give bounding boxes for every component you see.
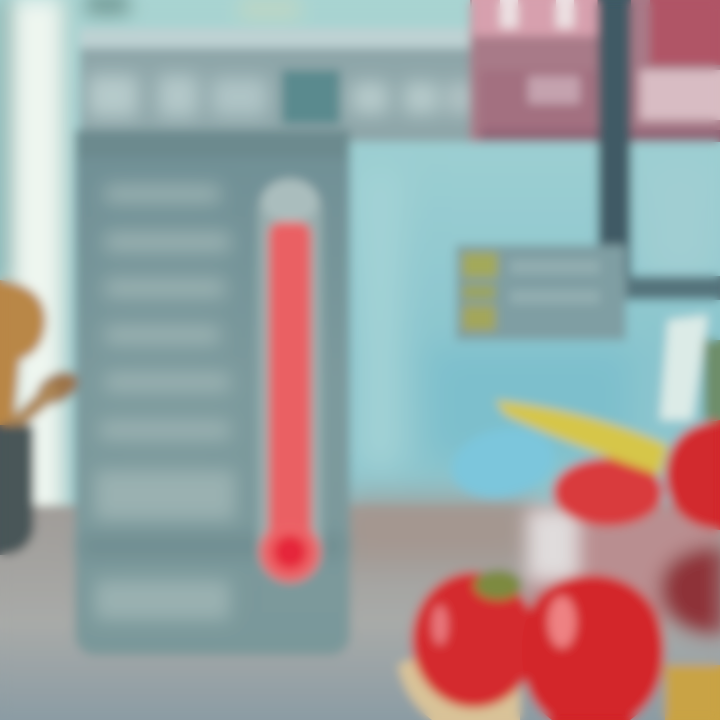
tomatoes bbox=[412, 570, 664, 720]
wooden bowl bbox=[398, 651, 720, 720]
poster body bbox=[75, 130, 350, 655]
pipe bbox=[598, 0, 720, 300]
red striped header at top right bbox=[470, 0, 720, 142]
blue scoop bbox=[445, 419, 561, 507]
poster header band bbox=[80, 28, 480, 142]
left window frame bbox=[0, 0, 72, 530]
wooden spoons bbox=[0, 280, 83, 430]
glass bowl bbox=[525, 505, 720, 635]
white utensil at right bbox=[660, 315, 708, 420]
table surface bbox=[0, 505, 720, 720]
thermometer bbox=[258, 178, 322, 583]
warm table tint bbox=[340, 500, 530, 560]
poster text blur bbox=[80, 185, 345, 620]
red pepper / tomato upper bbox=[553, 420, 720, 530]
small panel with yellow checks bbox=[456, 245, 626, 340]
utensil jar bbox=[0, 425, 34, 555]
yellow pepper slice bbox=[495, 400, 668, 475]
top wall band bbox=[80, 0, 480, 25]
